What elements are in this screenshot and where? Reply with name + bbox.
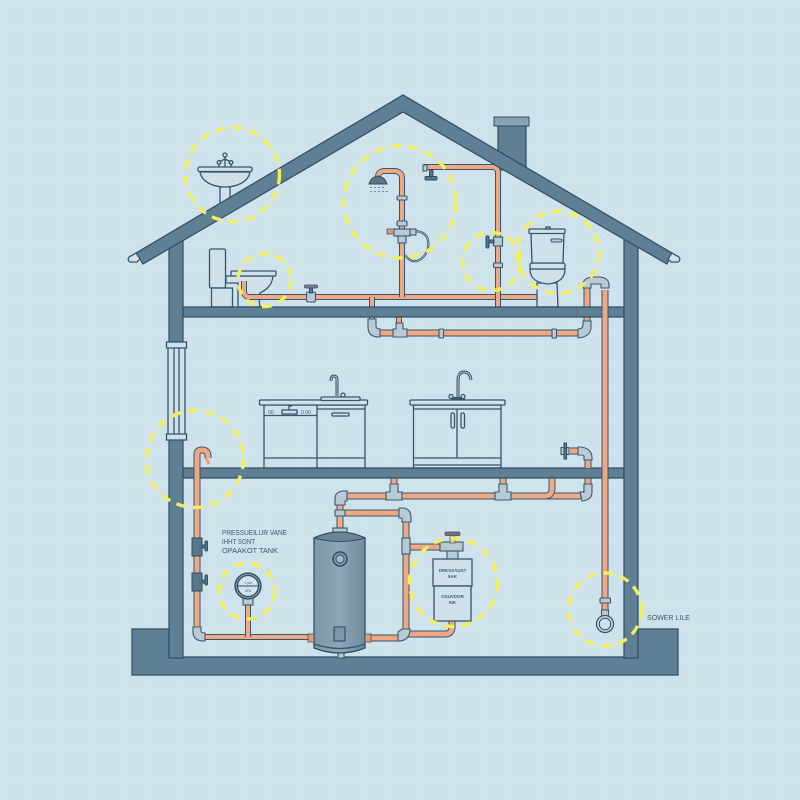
chimney: [494, 117, 529, 170]
pressure and expansion tank assembly: DRESSAUST: [439, 568, 467, 573]
shower stop valve upper right: [423, 165, 437, 180]
elbow bottom left: [193, 627, 205, 641]
pressure gauge: [235, 573, 261, 605]
upper floor pipes: [244, 167, 587, 333]
toilet right: [529, 227, 565, 307]
label: pressure valve text: [222, 530, 287, 555]
sink upstairs: [198, 153, 252, 210]
valve on right riser: [486, 236, 502, 268]
pressure and expansion tank assembly: 5IK: [449, 600, 457, 605]
label: pressure valve text: IHHT SONT: [222, 539, 256, 546]
highlight: sink: [186, 128, 280, 222]
highlight: sewer line: [568, 573, 642, 646]
lower pipes below the middle floor: [200, 478, 592, 641]
highlight: riser valve: [462, 232, 520, 290]
right vertical drain and sewer ring: [583, 277, 614, 632]
highlight: toilet left: [238, 254, 291, 306]
highlight: hook vent: [146, 410, 244, 508]
pressure and expansion tank assembly: OSUVDOR: [441, 594, 465, 599]
kitchen unit left: dishwasher and cabinet: [260, 376, 368, 468]
shower head and mixer: [369, 176, 428, 261]
kitchen unit left: dishwasher and cabinet: 00: [268, 410, 274, 416]
pressure and expansion tank assembly: 5AK: [448, 574, 458, 579]
label: pressure valve text: OPAAKOT TANK: [222, 548, 278, 555]
floors and walls structure: [132, 238, 678, 675]
highlight: shower: [344, 146, 456, 258]
elbow and tees on floor pipes: [368, 319, 591, 338]
pressure gauge: 1 psi: [244, 581, 252, 585]
highlight: toilet right: [517, 212, 599, 294]
water heater tank: [308, 528, 371, 658]
highlight: pressure tank: [410, 538, 498, 626]
toilet left: [210, 249, 276, 307]
downspout left: [166, 342, 186, 440]
pressure gauge: kPa: [245, 589, 251, 593]
label: pressure valve text: PRESSUEILUR VANE: [222, 530, 287, 537]
valve on upper run: [304, 285, 318, 302]
pressure and expansion tank assembly: [433, 532, 472, 621]
left riser and hook: [197, 450, 209, 634]
highlight: gauge: [219, 563, 275, 619]
roof: [128, 95, 680, 264]
kitchen unit left: dishwasher and cabinet: 0 00: [301, 410, 311, 416]
hose bib and elbow right of kitchen: [561, 443, 592, 468]
sewer line label: SOWER LILE: [647, 613, 690, 622]
valves on left riser: [192, 538, 208, 591]
kitchen unit right: sink cabinet: [410, 372, 505, 468]
